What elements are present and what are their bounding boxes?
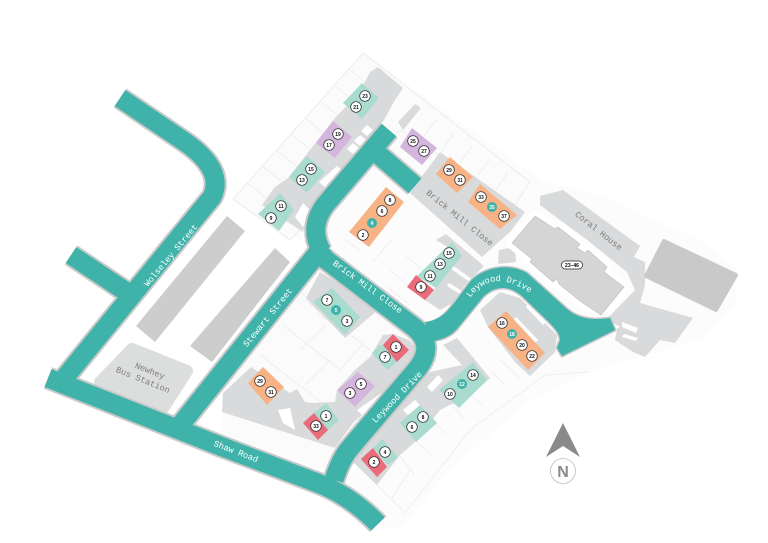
house 33 35 37: 37 bbox=[501, 214, 507, 220]
house 23 21: 21 bbox=[353, 105, 359, 111]
house 8 6 4 2: 4 bbox=[371, 221, 374, 227]
label: Newhey Bus Station: Bus Station bbox=[114, 365, 171, 396]
house 11 9: 11 bbox=[278, 204, 284, 210]
central drive bbox=[222, 334, 417, 448]
house 19 17 bbox=[316, 121, 352, 158]
house 9 red: 9 bbox=[420, 285, 423, 291]
house 14 12 10: 14 bbox=[470, 373, 476, 379]
house 11 9: 9 bbox=[270, 216, 273, 222]
house 8 6 4 2: 6 bbox=[381, 209, 384, 215]
house 25 27: 27 bbox=[421, 149, 427, 155]
house 25 27: 25 bbox=[410, 139, 416, 145]
drive east of Leywood bbox=[353, 338, 490, 485]
house 8 6: 6 bbox=[411, 425, 414, 431]
Coral House drive and parking bbox=[540, 190, 693, 357]
house 19 17: 17 bbox=[326, 143, 332, 149]
house 4 teal: 4 bbox=[384, 450, 387, 456]
Brick Mill Close east drive bbox=[410, 152, 525, 257]
house 15 13 11: 11 bbox=[427, 274, 433, 280]
house 15 13: 15 bbox=[308, 167, 314, 173]
house 8 6 4 2 bbox=[349, 187, 404, 247]
house 25 27 bbox=[400, 128, 437, 165]
road label: Leywood Drive south: Leywood Drive bbox=[370, 370, 425, 425]
label: Coral House: Coral House bbox=[573, 210, 624, 253]
house 29 31 west: 29 bbox=[257, 379, 263, 385]
house 9 red bbox=[407, 275, 434, 300]
house 16 18 20 22: 18 bbox=[509, 332, 515, 338]
label: Brick Mill Close drive: Brick Mill Close bbox=[424, 188, 495, 249]
house 1 teal bbox=[314, 403, 339, 430]
house 29 31: 31 bbox=[457, 178, 463, 184]
road label: Brick Mill Close: Brick Mill Close bbox=[330, 259, 404, 316]
service strip by 25 27 bbox=[398, 104, 421, 130]
house 1 red bbox=[383, 334, 409, 362]
house 15 13 11: 13 bbox=[437, 262, 443, 268]
house 7 5 3: 7 bbox=[326, 298, 329, 304]
house 2 red: 2 bbox=[373, 460, 376, 466]
house 19 17: 19 bbox=[335, 132, 341, 138]
label pill 23-46: 23–46 bbox=[565, 263, 579, 269]
road label: Stewart Street: Stewart Street bbox=[242, 286, 295, 349]
label pill 23-46 bbox=[562, 261, 582, 269]
NW service road bbox=[262, 67, 403, 232]
white bays bbox=[278, 125, 638, 430]
road label: Wolseley Street: Wolseley Street bbox=[143, 223, 200, 289]
house 7 teal: 7 bbox=[384, 355, 387, 361]
house 33 35 37: 35 bbox=[489, 205, 495, 211]
bus station bbox=[100, 349, 187, 407]
house 2 red bbox=[361, 448, 387, 477]
drive near 15-9 bbox=[425, 234, 484, 310]
parking and service roads bbox=[222, 67, 693, 485]
house 7 5 3 bbox=[313, 288, 360, 335]
house 29 31 west bbox=[248, 367, 284, 405]
small access stub bbox=[498, 247, 516, 264]
long grey car park 2 bbox=[190, 248, 290, 362]
house 15 13: 13 bbox=[299, 178, 305, 184]
house 5 3 bbox=[337, 372, 375, 407]
house 16 18 20 22: 22 bbox=[529, 354, 535, 360]
house 29 31 west: 31 bbox=[268, 390, 274, 396]
house 33 red: 33 bbox=[313, 424, 319, 430]
house 14 12 10: 12 bbox=[459, 382, 465, 388]
house 7 5 3: 5 bbox=[335, 308, 338, 314]
house 16 18 20 22: 16 bbox=[499, 321, 505, 327]
road label: Shaw Road: Shaw Road bbox=[212, 439, 259, 465]
house 29 31 bbox=[436, 157, 473, 193]
house 15 13 11 bbox=[417, 242, 462, 288]
house 5 3: 5 bbox=[360, 382, 363, 388]
house 15 13 11: 15 bbox=[446, 251, 452, 257]
far right car park bbox=[646, 241, 736, 310]
house 8 6 4 2: 8 bbox=[389, 198, 392, 204]
site plots background bbox=[222, 53, 738, 530]
house 23 21 bbox=[343, 83, 379, 119]
house 14 12 10: 10 bbox=[447, 392, 453, 398]
road network bbox=[48, 98, 615, 524]
house 33 35 37: 33 bbox=[478, 195, 484, 201]
house 8 6 bbox=[400, 405, 437, 442]
house 16 18 20 22: 20 bbox=[519, 343, 525, 349]
house 8 6 4 2: 2 bbox=[362, 233, 365, 239]
house 29 31: 29 bbox=[446, 168, 452, 174]
house 7 5 3: 3 bbox=[346, 319, 349, 325]
house 14 12 10 bbox=[439, 362, 487, 408]
drive around 7 5 3 bbox=[306, 272, 378, 338]
house 1 teal: 1 bbox=[325, 414, 328, 420]
north arrow bbox=[546, 423, 580, 484]
house 33 35 37 bbox=[468, 184, 517, 229]
label: Newhey Bus Station: Newhey bbox=[133, 361, 166, 382]
north arrow: N bbox=[557, 464, 569, 481]
house 33 red bbox=[303, 413, 328, 440]
road label: Leywood Drive east: Leywood Drive bbox=[466, 274, 532, 297]
house 4 teal bbox=[373, 439, 398, 465]
apartment block 23-46 bbox=[512, 216, 624, 315]
drive around 16-22 bbox=[480, 292, 557, 376]
long grey car park 1 bbox=[136, 216, 245, 342]
house 15 13 bbox=[289, 156, 325, 193]
house 7 teal bbox=[372, 345, 397, 370]
house 23 21: 23 bbox=[362, 94, 368, 100]
house 1 red: 1 bbox=[395, 345, 398, 351]
house 8 6: 8 bbox=[422, 415, 425, 421]
house 16 18 20 22 bbox=[488, 311, 545, 370]
house 5 3: 3 bbox=[349, 391, 352, 397]
house 11 9 bbox=[258, 193, 294, 231]
